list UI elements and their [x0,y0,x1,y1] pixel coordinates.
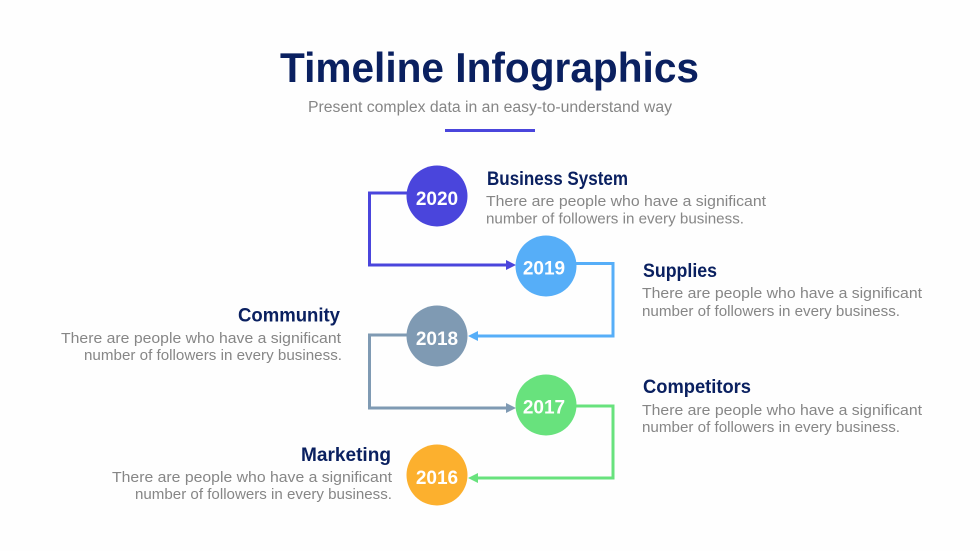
text block: Marketing [112,445,393,503]
node: 2018 [406,306,468,366]
text block: Business System: number of followers in every business. [486,210,744,228]
subtitle: Present complex data in an easy-to-understand way [308,99,672,116]
title underline [445,129,535,132]
text block: Business System: There are people who have a significant [486,193,767,210]
text block: Community: number of followers in every business. [84,347,342,364]
text block: Supplies [642,261,923,320]
node: 2019: 2019 [523,258,565,280]
text block: Community: There are people who have a significant [61,330,342,347]
node: 2016: 2016 [416,468,458,489]
node: 2018: 2018 [416,329,458,350]
text block: Supplies: Supplies [643,261,717,282]
node: 2016 [406,444,468,506]
node: 2019 [516,236,576,296]
text block: Competitors: number of followers in every business. [642,419,900,436]
node: 2017 [516,374,576,436]
arrow: 2020 to 2019 [370,193,516,270]
text block: Supplies: There are people who have a significant [642,285,923,302]
text block: Community [61,306,342,364]
text block: Marketing: There are people who have a significant [112,469,393,486]
text block: Business System [486,169,767,228]
text block: Community: Community [238,306,340,326]
text block: Business System: Business System [487,169,628,190]
arrow: 2017 to 2016 [468,406,613,483]
node: 2017: 2017 [523,398,565,418]
text block: Competitors: Competitors [643,377,751,398]
node: 2020 [406,166,468,226]
arrow: 2019 to 2018 [468,264,613,341]
text block: Marketing: number of followers in every business. [135,486,392,503]
title: Timeline Infographics [280,44,699,91]
text block: Supplies: number of followers in every business. [642,303,900,320]
text block: Competitors: There are people who have a significant [642,402,923,419]
arrow: 2018 to 2017 [370,335,516,413]
text block: Competitors [642,377,923,436]
node: 2020: 2020 [416,189,458,210]
text block: Marketing: Marketing [301,445,391,466]
